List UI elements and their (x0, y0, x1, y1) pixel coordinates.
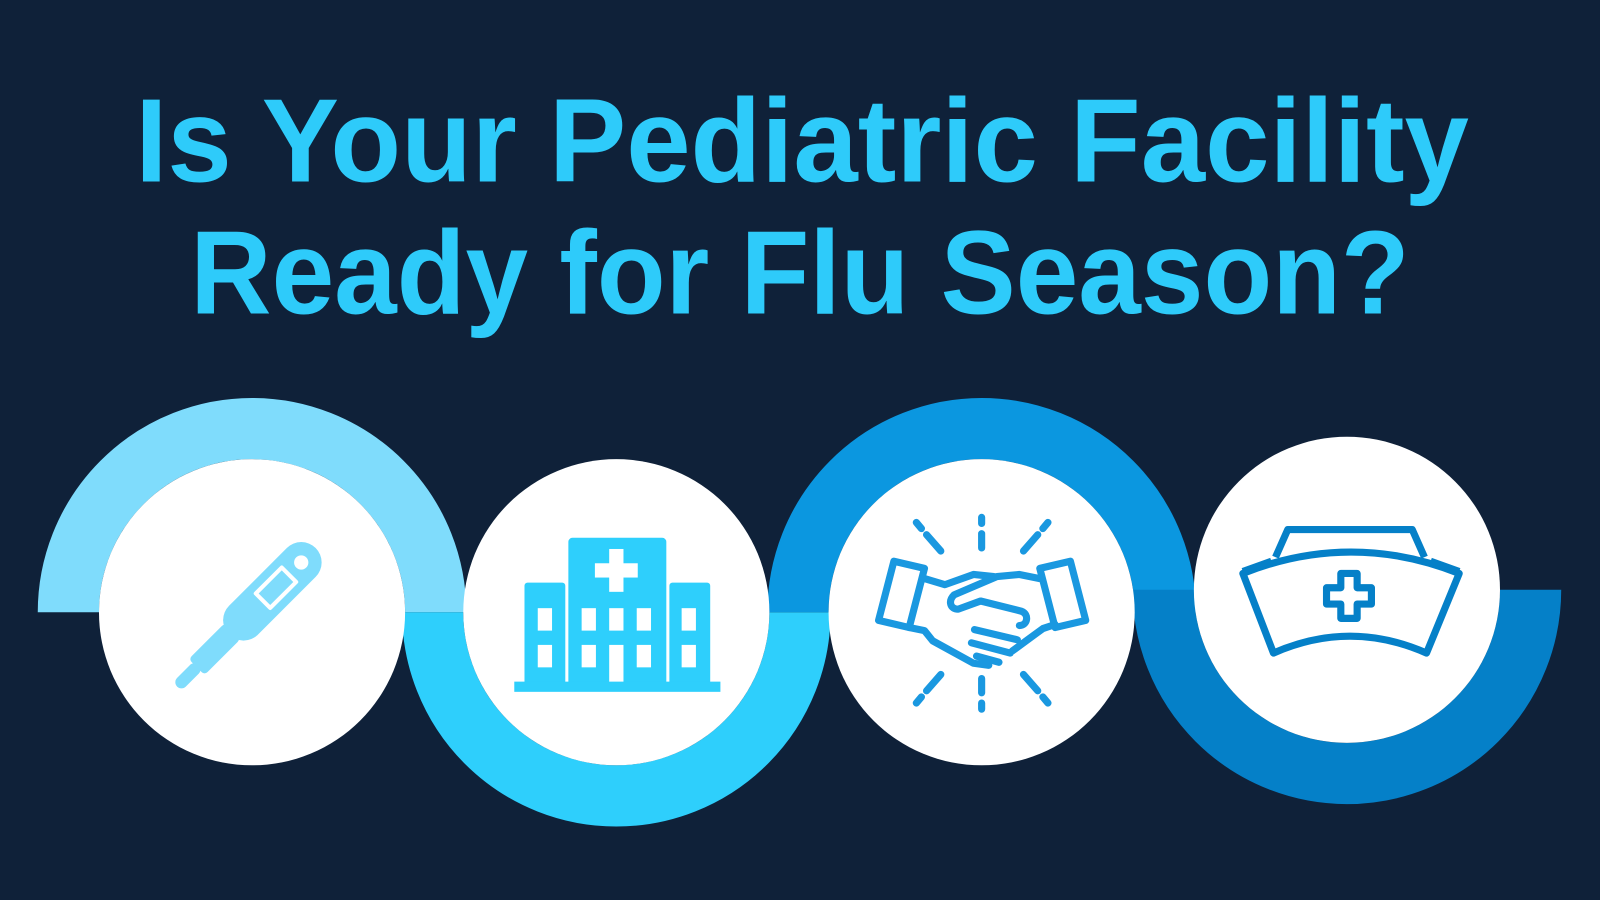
title: Is Your Pediatric Facility (135, 76, 1469, 208)
title: Ready for Flu Season? (190, 207, 1410, 339)
circle 1 with thermometer (99, 459, 405, 765)
arc 1 (68, 429, 436, 612)
circle 4 with nurse cap (1194, 437, 1500, 743)
arc 3 (798, 429, 1165, 612)
circle 3 with handshake (829, 459, 1135, 765)
icon: hospital (514, 538, 720, 692)
icon: thermometer (163, 534, 330, 701)
icon: handshake (879, 517, 1086, 709)
arc 4 (1163, 590, 1531, 773)
icon: nurse cap (1243, 530, 1459, 653)
arc 2 (433, 612, 800, 796)
title (135, 76, 1469, 339)
circle 2 with hospital (463, 459, 769, 765)
